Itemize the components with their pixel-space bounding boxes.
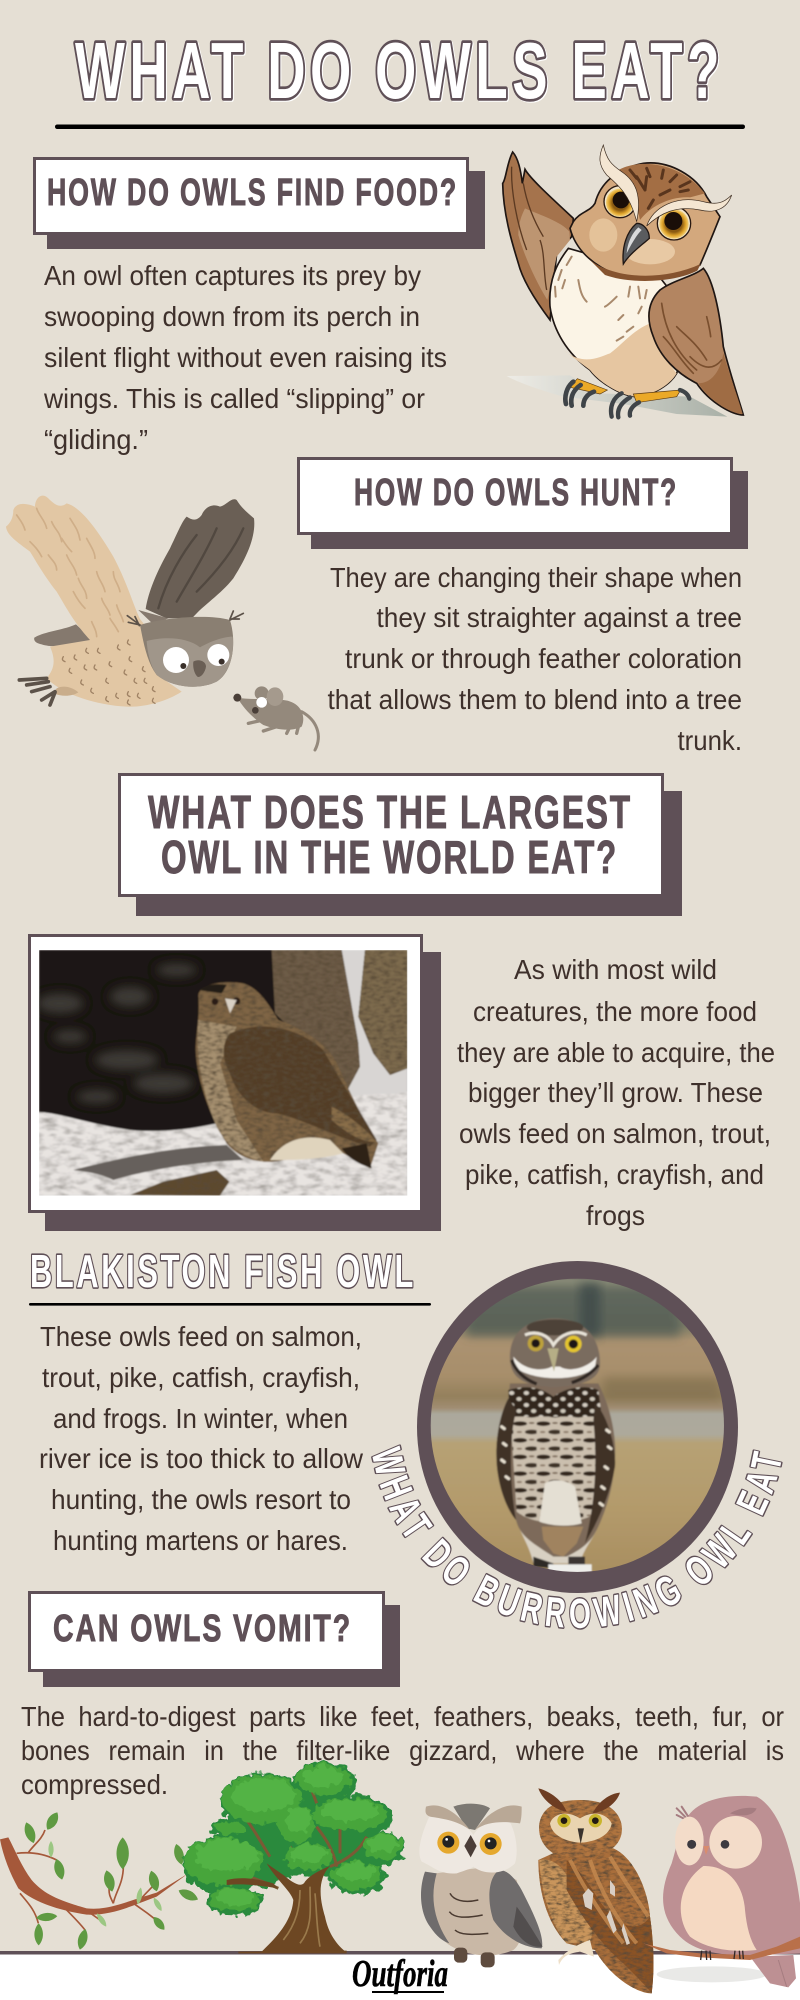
text block: finding food: An owl often captures its prey by <box>44 260 421 291</box>
heading: what does the largest owl in the world eat: WHAT DOES THE LARGEST <box>148 786 632 838</box>
panel: how do owls find food <box>34 158 485 249</box>
text block: indigestible parts: compressed. <box>21 1769 168 1800</box>
text block: finding food <box>43 260 447 455</box>
text block: hunting: that allows them to blend into a tree <box>328 684 742 715</box>
text block: more food bigger owls: creatures, the more food <box>473 996 757 1027</box>
logo: outforia: Outforia <box>352 1953 448 1995</box>
panel: burrowing owl round photo <box>417 1261 738 1593</box>
text block: blakiston diet: and frogs. In winter, when <box>53 1403 348 1434</box>
text block: blakiston diet: trout, pike, catfish, crayfish, <box>42 1362 360 1393</box>
icon: flying owl chasing a mouse <box>6 496 318 750</box>
text block: blakiston diet: river ice is too thick to allow <box>39 1443 364 1474</box>
heading: how do owls find food: HOW DO OWLS FIND FOOD? <box>47 172 458 214</box>
panel: blakiston fish owl photo frame <box>30 936 441 1231</box>
text block: hunting: trunk. <box>678 725 742 756</box>
text block: more food bigger owls: bigger they’ll grow. These <box>468 1077 763 1108</box>
icon: grey and white watercolor owl <box>419 1804 543 1967</box>
text block: more food bigger owls <box>457 954 775 1231</box>
text block: finding food: silent flight without even raising its <box>44 342 447 373</box>
title divider <box>55 124 745 129</box>
text block: blakiston diet <box>39 1321 364 1556</box>
text block: blakiston diet: hunting martens or hares. <box>53 1525 348 1556</box>
text block: hunting: They are changing their shape when <box>330 562 742 593</box>
heading: what does the largest owl in the world eat: OWL IN THE WORLD EAT? <box>161 831 618 883</box>
text block: blakiston diet: hunting, the owls resort to <box>51 1484 351 1515</box>
icon: green tree <box>183 1762 405 1953</box>
text block: blakiston diet: These owls feed on salmon, <box>40 1321 362 1352</box>
text block: hunting: they sit straighter against a tree <box>376 602 742 633</box>
panel: can owls vomit <box>30 1592 400 1687</box>
text block: more food bigger owls: pike, catfish, crayfish, and <box>465 1159 764 1190</box>
icon: cartoon brown owl waving <box>503 145 743 417</box>
text block: more food bigger owls: owls feed on salmon, trout, <box>459 1118 771 1149</box>
text block: finding food: “gliding.” <box>44 424 148 455</box>
heading: can owls vomit: CAN OWLS VOMIT? <box>53 1608 352 1650</box>
heading: what does the largest owl in the world eat <box>148 786 632 883</box>
heading underline <box>29 1303 431 1306</box>
text block: finding food: swooping down from its perch in <box>44 301 420 332</box>
text block: more food bigger owls: frogs <box>586 1200 645 1231</box>
text block: finding food: wings. This is called “slipping” or <box>43 383 425 414</box>
panel: what does the largest owl eat <box>120 774 682 916</box>
photo: burrowing owl on a post <box>430 1279 725 1573</box>
text block: more food bigger owls: As with most wild <box>514 954 717 985</box>
icon: pink owl on a branch <box>643 1796 800 1987</box>
heading: blakiston fish owl: BLAKISTON FISH OWL <box>30 1245 416 1297</box>
text block: more food bigger owls: they are able to acquire, the <box>457 1037 775 1068</box>
icon: brown watercolor owl <box>538 1788 653 1993</box>
text block: indigestible parts <box>21 1701 784 1800</box>
text block: hunting <box>328 562 742 756</box>
panel: how do owls hunt <box>298 458 748 549</box>
curved heading: what do burrowing owl eat: WHAT DO BURROWING OWL EAT <box>371 1444 783 1630</box>
photo: owl standing on snow <box>37 950 407 1196</box>
icon: leafy branch <box>0 1810 200 1951</box>
text block: hunting: trunk or through feather coloration <box>345 643 742 674</box>
